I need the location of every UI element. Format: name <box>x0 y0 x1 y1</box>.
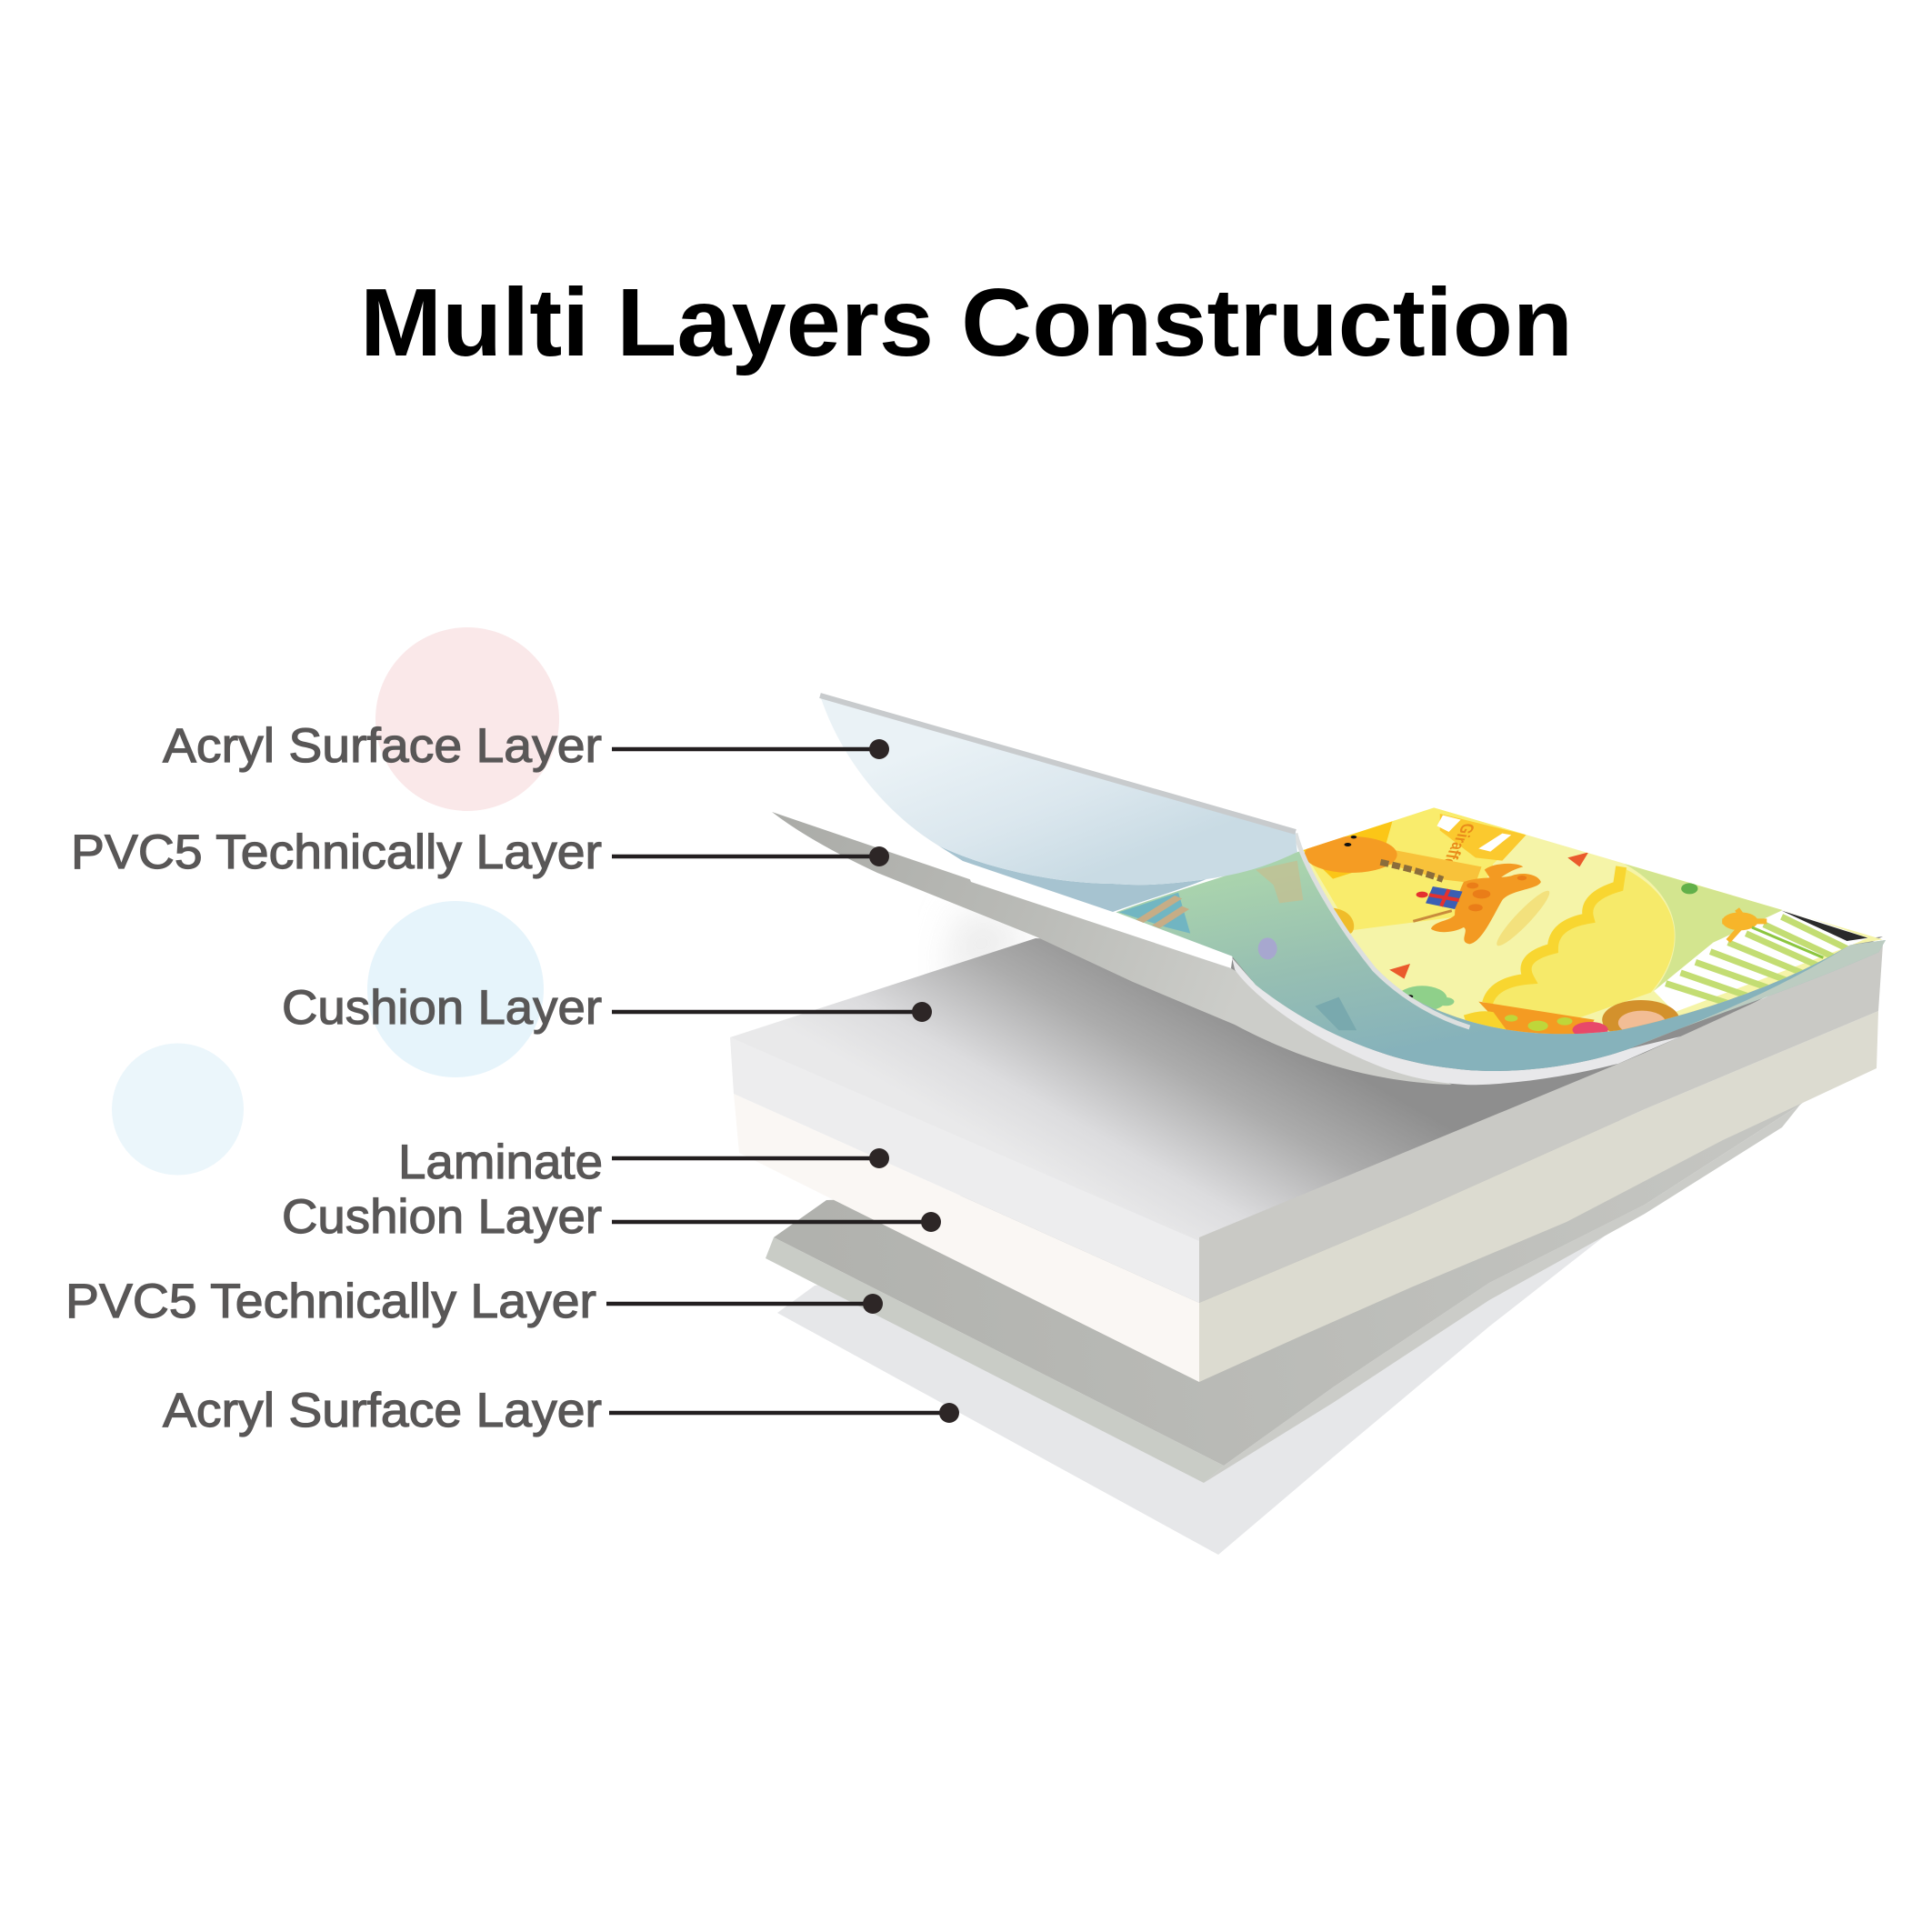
pattern on reverse side <box>1119 861 1356 1030</box>
layer: laminate and upper cushion slab <box>730 936 1883 1303</box>
label: Acryl Surface Layer lower: Acryl Surface Layer <box>163 1384 602 1437</box>
label: PVC5 Technically Layer: PVC5 Technically Layer <box>71 826 602 879</box>
label: Acryl Surface Layer lower <box>163 1384 959 1437</box>
circle: blue decoration <box>367 901 544 1077</box>
circle: pink decoration <box>375 627 559 811</box>
label: Cushion Layer lower <box>282 1190 941 1244</box>
lip: white edge of curled sheet <box>1232 957 1680 1085</box>
frog <box>1402 986 1455 1009</box>
heart <box>1573 1022 1608 1034</box>
white strip on upper sheet <box>963 861 1233 968</box>
giraffe <box>1305 836 1541 944</box>
red leaves <box>1389 852 1588 979</box>
right band of curled sheet <box>1630 940 1886 1048</box>
green meadow <box>1624 864 1785 991</box>
label: Laminate: Laminate <box>398 1136 603 1189</box>
giraffe house: Giraffe <box>1437 822 1479 867</box>
layered mat illustration <box>730 696 1892 1555</box>
label: Acryl Surface Layer: Acryl Surface Layer <box>163 719 602 773</box>
monkey <box>1602 1000 1678 1031</box>
scallop border <box>1487 866 1621 1003</box>
layer: bottom acryl surface sheet <box>777 1064 1855 1555</box>
label: Cushion Layer lower: Cushion Layer <box>282 1190 602 1244</box>
gift box <box>1416 886 1463 909</box>
small frog <box>1681 883 1697 894</box>
curled printed sheet <box>1116 803 1892 1085</box>
top edge of clear film <box>820 696 1296 832</box>
black corner <box>1782 911 1867 941</box>
label: PVC5 Technically Layer <box>71 826 889 879</box>
label: PVC5 Technically Layer lower: PVC5 Technically Layer <box>65 1275 596 1328</box>
label: Acryl Surface Layer <box>163 719 889 773</box>
thin clear edge along the curl <box>1296 834 1469 1027</box>
label: Cushion Layer <box>282 981 932 1035</box>
shadow behind the cushion <box>946 909 1036 991</box>
giraffe house <box>1436 814 1526 862</box>
layer: lower cushion slab <box>734 1011 1878 1382</box>
striped fence <box>1654 909 1867 1012</box>
label: PVC5 Technically Layer lower <box>65 1275 883 1328</box>
printed play-mat surface <box>1304 807 1882 1035</box>
layer: top acryl clear film <box>820 696 1297 885</box>
flower <box>1722 909 1823 957</box>
reverse side of printed sheet <box>1116 850 1886 1071</box>
label: Cushion Layer: Cushion Layer <box>282 981 602 1035</box>
title: Multi Layers Construction <box>360 269 1573 376</box>
scalloped yellow hill <box>1487 866 1675 1034</box>
label: Laminate <box>398 1136 889 1189</box>
yellow wedge <box>1303 807 1527 930</box>
layer: bottom PVC5 sheet <box>766 1064 1855 1483</box>
layer: upper PVC5 sheet <box>772 812 1452 1085</box>
party hat <box>1478 1002 1595 1035</box>
pale shadow <box>1497 891 1549 946</box>
band under clear film <box>938 846 1206 912</box>
circle: small blue decoration <box>112 1044 244 1175</box>
